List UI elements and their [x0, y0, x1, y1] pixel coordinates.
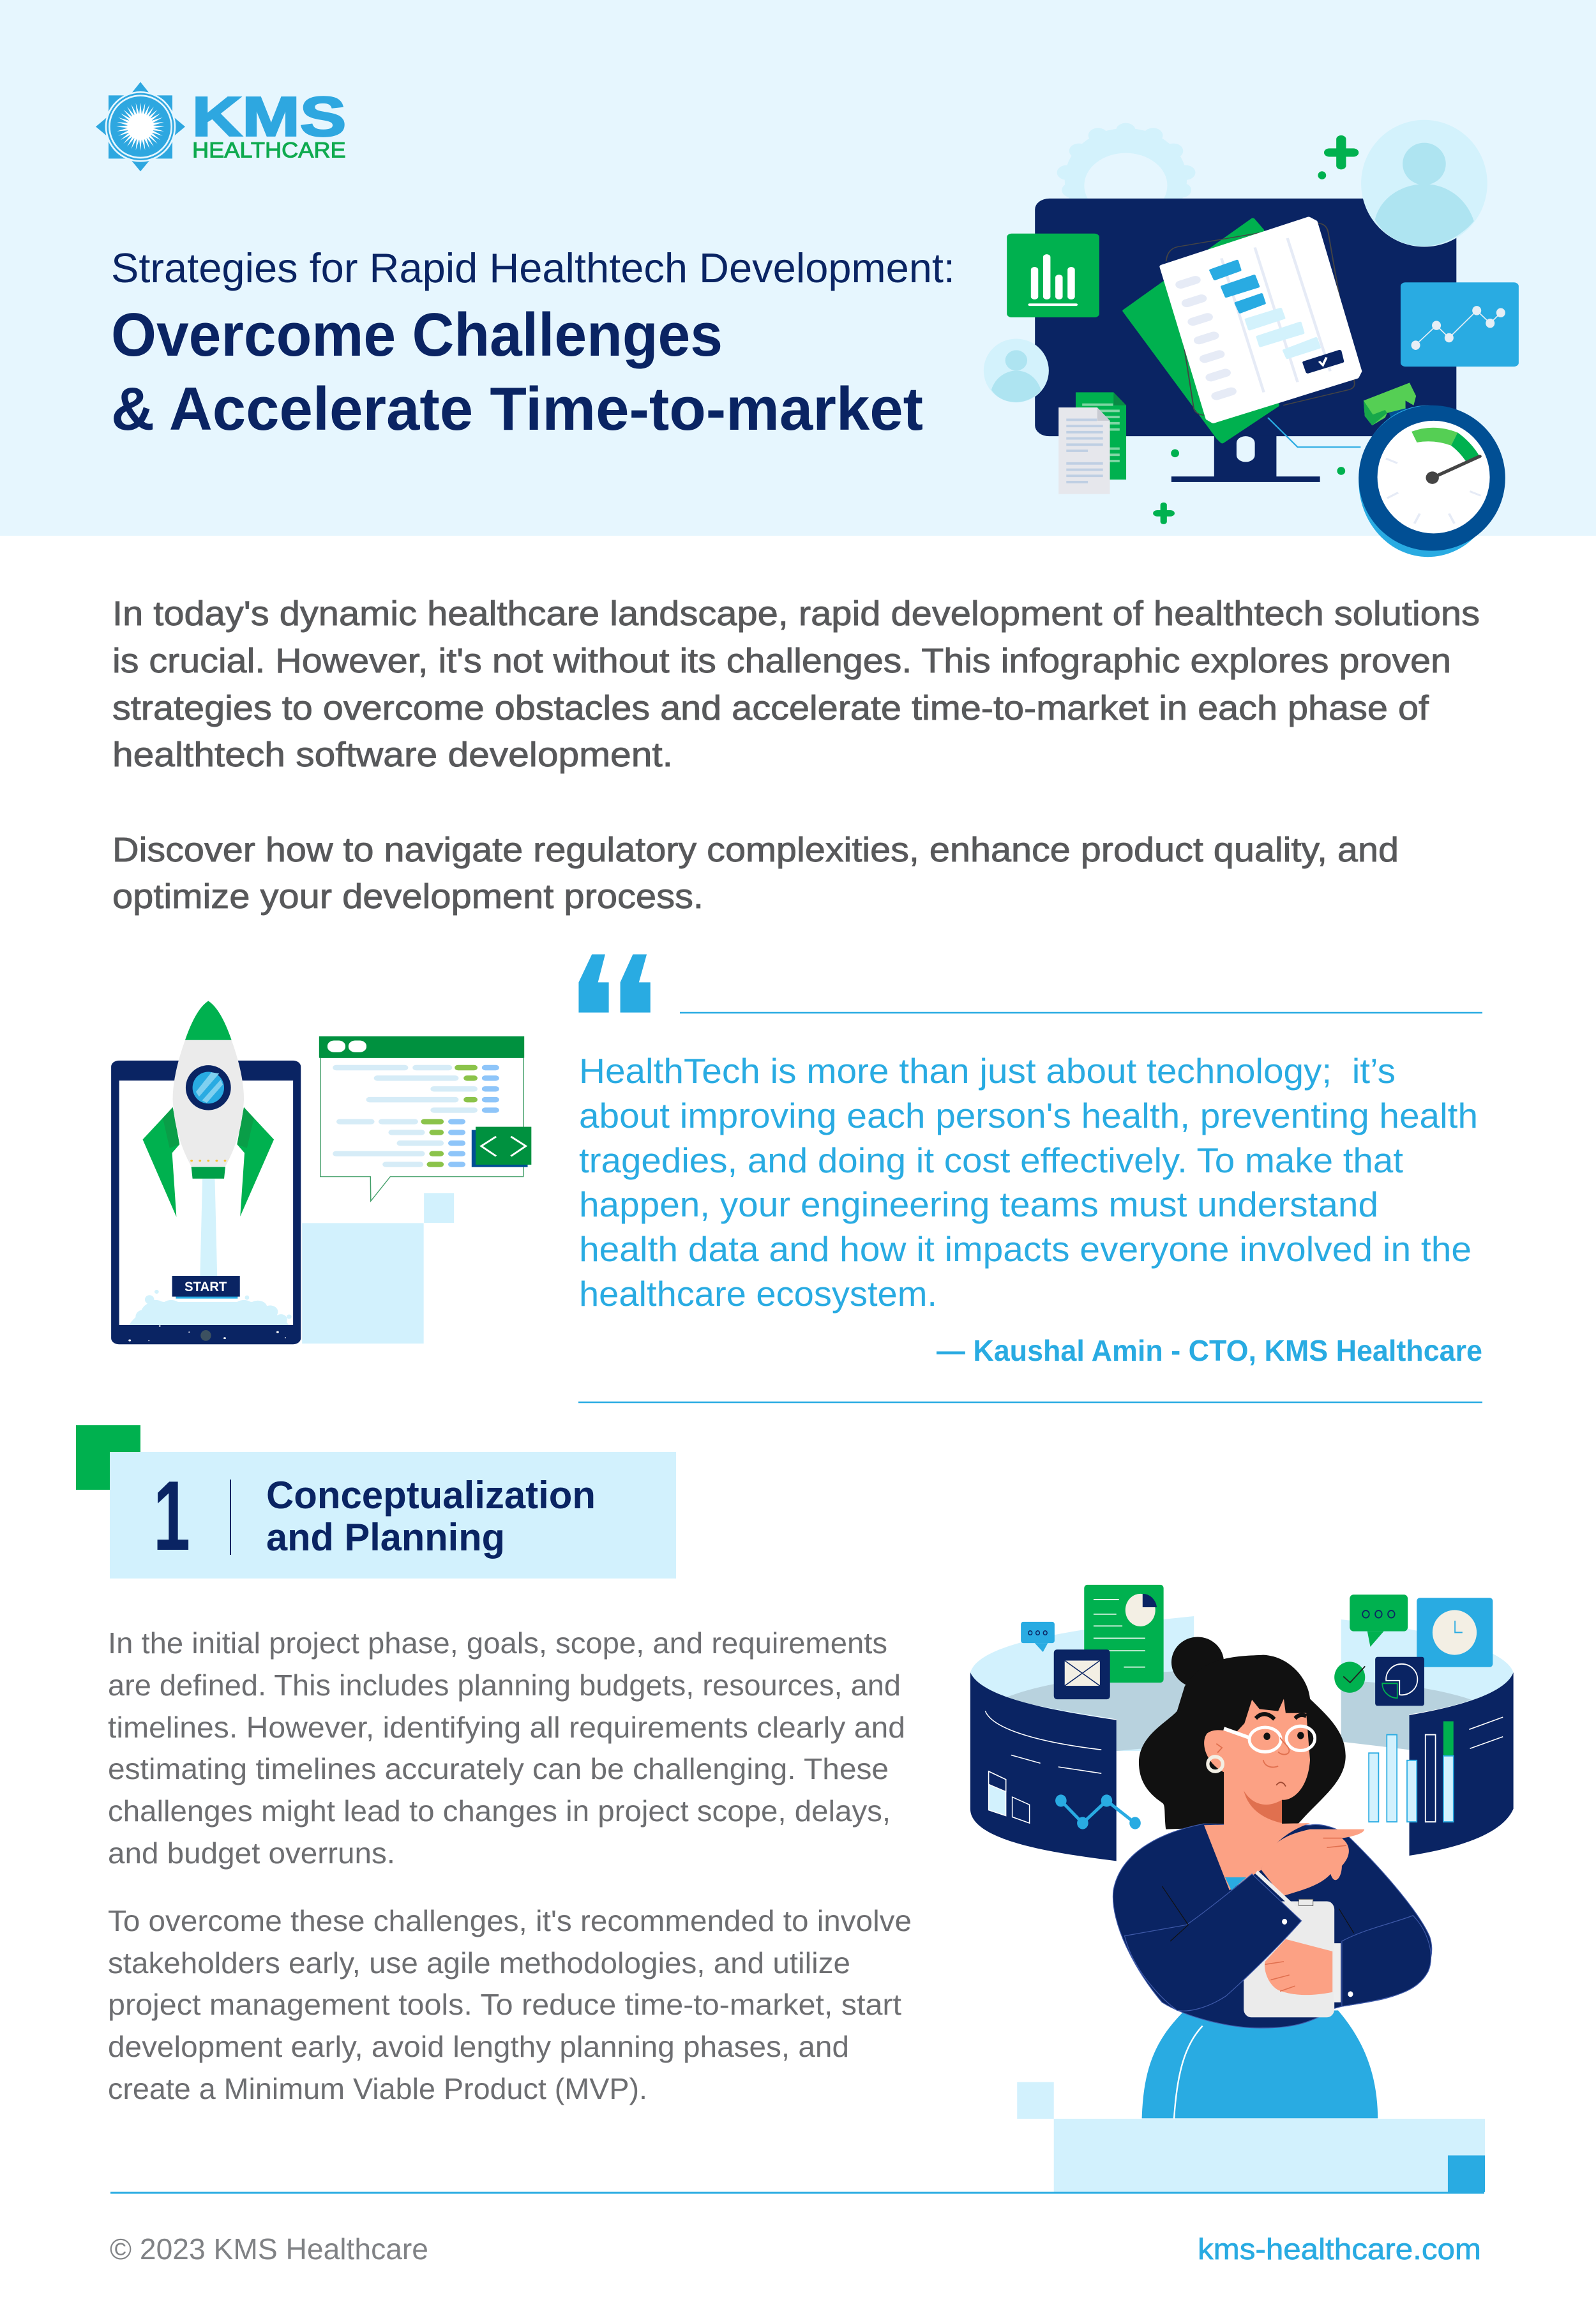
section number: 1	[153, 1460, 190, 1571]
text block: section 1 body	[108, 1626, 912, 2105]
icon: stopwatch	[1359, 382, 1505, 557]
text block: section 1 body: timelines. However, identifying all requirements clearly and	[108, 1711, 905, 1744]
footer rule	[110, 2192, 1484, 2194]
icon: large avatar	[1361, 120, 1487, 247]
section heading: Conceptualization	[266, 1474, 596, 1517]
clipboard	[1244, 1901, 1334, 2017]
icon: envelope	[1054, 1649, 1110, 1699]
text block: section 1 body: create a Minimum Viable Product (MVP).	[108, 2072, 647, 2105]
decorative light squares	[302, 1193, 454, 1344]
icon: gantt chart papers	[1124, 218, 1360, 442]
main title line 2: & Accelerate Time-to-market	[111, 375, 923, 443]
icon: monitor	[1035, 199, 1456, 482]
quote text: tragedies, and doing it cost effectively. To make that	[579, 1140, 1403, 1180]
icon: quotation mark	[578, 955, 651, 1013]
icon: start button	[172, 1276, 240, 1299]
text block: section 1 body: are defined. This includes planning budgets, resources, and	[108, 1669, 901, 1702]
icon: pie chart tile	[1375, 1657, 1424, 1706]
intro text: optimize your development process.	[112, 877, 704, 916]
icon: green bar chart tile	[1007, 234, 1099, 317]
icon: connector line	[1268, 418, 1360, 447]
quote text: health data and how it impacts everyone involved in the	[579, 1229, 1472, 1269]
right sleeve	[1342, 1916, 1431, 2006]
illustration: monitor dashboard with stopwatch	[984, 120, 1519, 557]
illustration: woman with floating dashboards	[970, 1585, 1514, 2192]
icon: blue line chart tile	[1401, 282, 1519, 367]
hair	[1139, 1637, 1346, 1829]
icon: green chat bubble	[1350, 1594, 1408, 1647]
intro text: Discover how to navigate regulatory complexities, enhance product quality, and	[112, 831, 1399, 869]
icon: stacked documents	[1058, 392, 1126, 494]
footer copyright: © 2023 KMS Healthcare	[110, 2232, 428, 2266]
text block: section 1 body: To overcome these challenges, it's recommended to involve	[108, 1904, 912, 1937]
footer website: kms-healthcare.com	[1198, 2232, 1481, 2266]
face and neck	[1204, 1699, 1310, 1825]
icon: clock tile	[1417, 1598, 1493, 1667]
text block: section 1 body: challenges might lead to changes in project scope, delays,	[108, 1794, 891, 1828]
intro text	[112, 594, 1480, 916]
icon: start button: START	[184, 1279, 227, 1294]
logo: KMS Healthcare: HEALTHCARE	[192, 138, 346, 162]
text block: section 1 body: stakeholders early, use agile methodologies, and utilize	[108, 1946, 850, 1980]
left curved panel	[970, 1672, 1141, 1861]
intro text: In today's dynamic healthcare landscape, rapid development of healthtech solutions	[112, 594, 1480, 633]
icon: exhaust and smoke	[130, 1179, 292, 1325]
panel: quote	[578, 955, 1482, 1402]
intro text: strategies to overcome obstacles and accelerate time-to-market in each phase of	[112, 689, 1429, 727]
jacket	[1113, 1824, 1432, 2028]
icon: gear	[1057, 123, 1195, 231]
platform disc	[970, 1616, 1514, 1751]
chest	[1204, 1823, 1310, 1890]
icon: blue chat bubble	[1021, 1622, 1055, 1652]
quote text	[579, 1051, 1478, 1314]
text block: section 1 body: development early, avoid lengthy planning phases, and	[108, 2030, 849, 2063]
icon: green report	[1084, 1585, 1164, 1683]
quote attribution: — Kaushal Amin - CTO, KMS Healthcare	[937, 1334, 1482, 1367]
figure: woman	[1113, 1637, 1432, 2118]
icon: check badge	[1334, 1662, 1365, 1693]
pointing hand	[1261, 1829, 1364, 1897]
panel: section 1 heading	[76, 1425, 676, 1579]
intro text: is crucial. However, it's not without its challenges. This infographic explores proven	[112, 642, 1451, 680]
text block: section 1 body: In the initial project phase, goals, scope, and requirements	[108, 1626, 887, 1660]
icon: green plus marks and dots	[1153, 135, 1359, 524]
decorative base blocks	[1017, 2082, 1485, 2192]
right curved panel with bars	[1369, 1672, 1514, 1856]
icon: small avatar	[984, 338, 1049, 402]
holding hand	[1265, 1939, 1332, 1995]
icon: tablet	[111, 1061, 301, 1344]
quote text: HealthTech is more than just about technology; it’s	[579, 1051, 1396, 1091]
intro text: healthtech software development.	[112, 736, 673, 774]
left sleeve	[1125, 1874, 1302, 2011]
text block: section 1 body: estimating timelines accurately can be challenging. These	[108, 1752, 889, 1785]
text block: section 1 body: and budget overruns.	[108, 1836, 395, 1870]
main title line 1: Overcome Challenges	[111, 301, 723, 369]
subtitle: Strategies for Rapid Healthtech Development:	[111, 245, 955, 291]
text block: section 1 body: project management tools. To reduce time-to-market, start	[108, 1988, 901, 2021]
quote text: happen, your engineering teams must understand	[579, 1185, 1378, 1224]
title block	[111, 245, 955, 443]
icon: code speech bubble	[319, 1036, 531, 1201]
skirt	[1142, 2010, 1378, 2118]
quote text: about improving each person's health, preventing health	[579, 1096, 1478, 1135]
logo: KMS Healthcare	[96, 82, 346, 171]
logo: KMS Healthcare: KMS	[192, 86, 346, 148]
glasses and facial features	[1208, 1714, 1315, 1787]
section heading	[266, 1474, 596, 1559]
section heading: and Planning	[266, 1516, 505, 1559]
quote text: healthcare ecosystem.	[579, 1274, 937, 1314]
icon: rocket	[143, 1001, 274, 1217]
panel: header background	[0, 0, 1596, 536]
illustration: rocket launching from tablet with code bubble	[111, 1001, 531, 1344]
